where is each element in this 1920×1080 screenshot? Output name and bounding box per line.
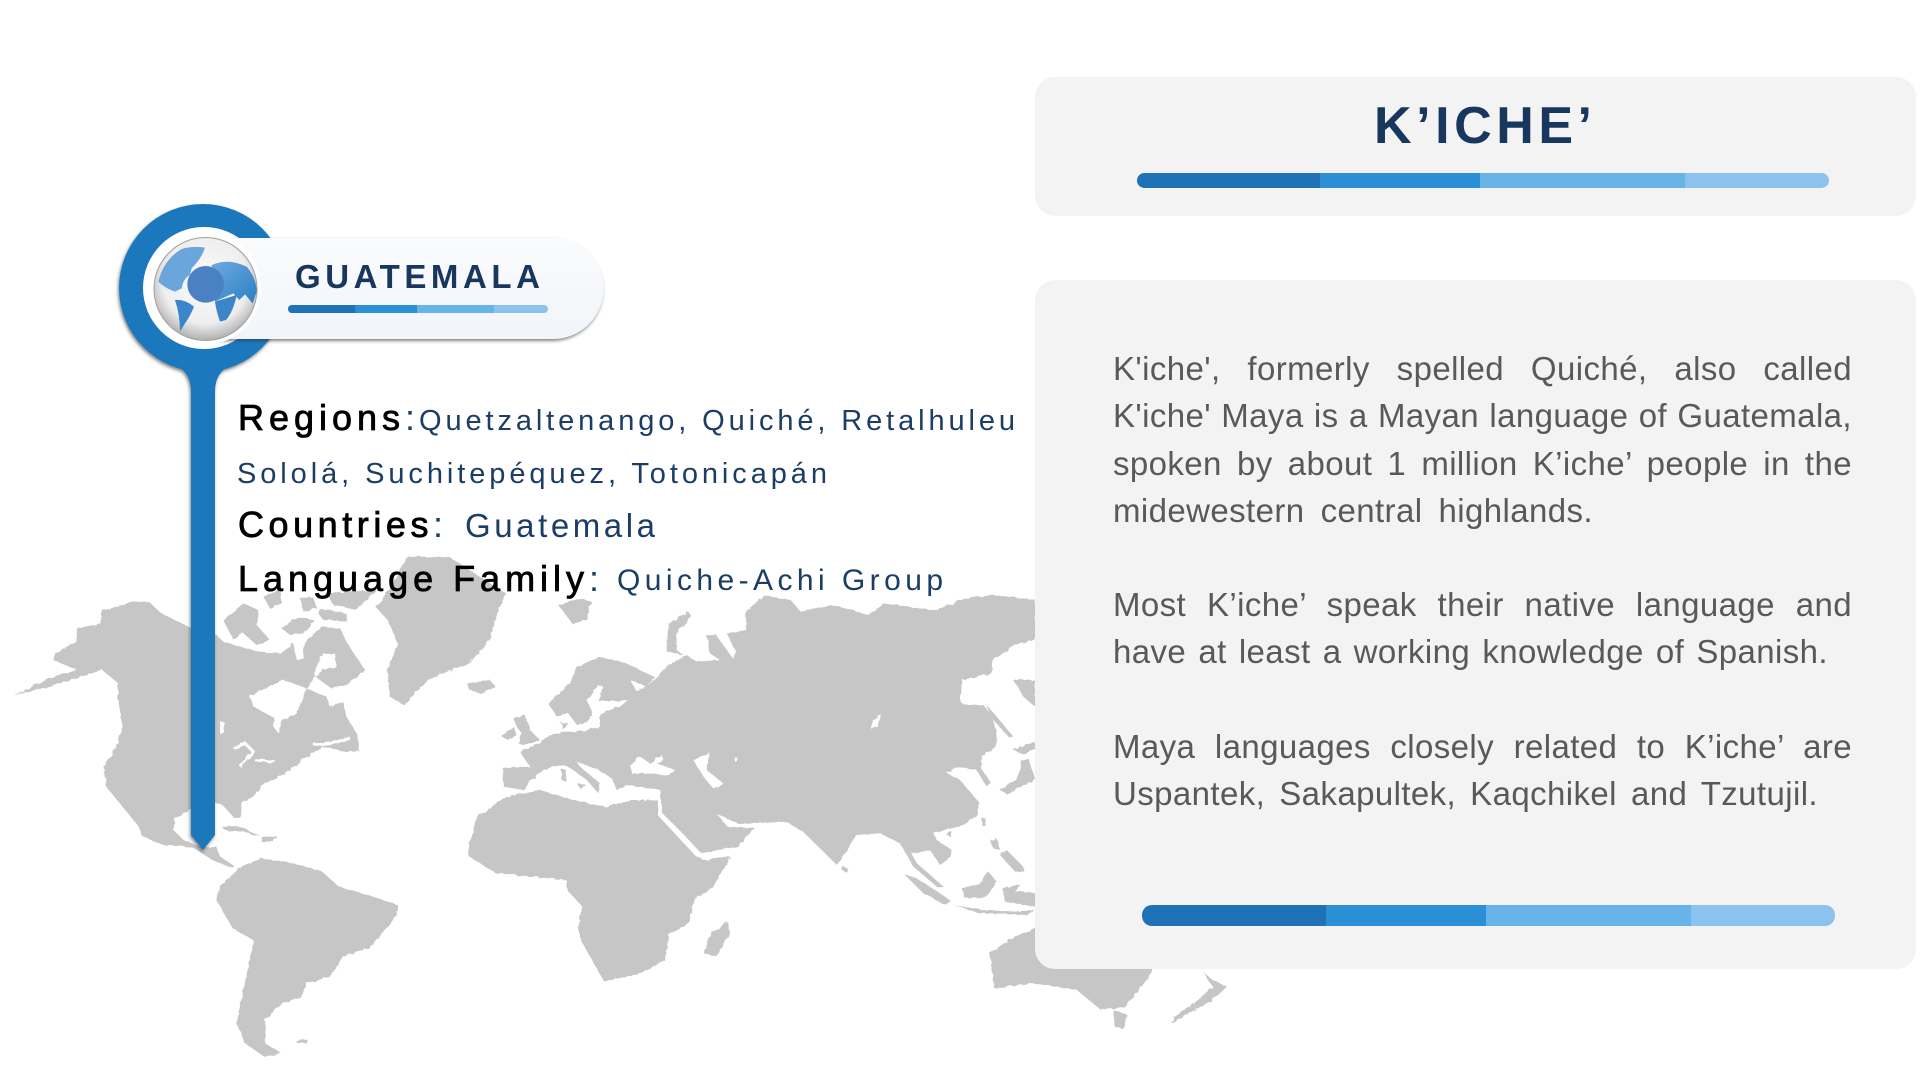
- regions label: Regions:: [238, 397, 415, 438]
- countries value: Guatemala: [465, 507, 656, 544]
- pin stem and ring: [119, 204, 287, 850]
- pin inner circle: [143, 227, 265, 349]
- panel: description: Maya languages closely related to K’iche’ are: [1113, 728, 1852, 765]
- regions and family details: [237, 397, 1015, 599]
- panel: description: K'iche' Maya is a Mayan language of Guatemala,: [1113, 397, 1852, 434]
- panel: description: Uspantek, Sakapultek, Kaqchikel and Tzutujil.: [1113, 775, 1818, 812]
- East Asia islands: [905, 680, 1035, 915]
- regions values line one: Quetzaltenango, Quiché, Retalhuleu: [419, 405, 1015, 437]
- country label pill: [147, 231, 604, 345]
- panel: description: midewestern central highlands.: [1113, 492, 1593, 529]
- language family label: Language Family:: [238, 558, 599, 599]
- title bar: [1137, 173, 1829, 188]
- countries label: Countries:: [238, 504, 443, 545]
- panel: description: Most K’iche’ speak their native language and: [1113, 586, 1852, 623]
- panel: description: spoken by about 1 million K’iche’ people in the: [1113, 445, 1852, 482]
- title: K’ICHE’: [1374, 97, 1592, 155]
- country name: GUATEMALA: [295, 258, 540, 295]
- paragraph: related languages: [1113, 728, 1852, 812]
- panel: description: [1035, 280, 1916, 969]
- panel: description: K'iche', formerly spelled Quiché, also called: [1113, 350, 1852, 387]
- paragraph: speakers: [1113, 586, 1852, 670]
- panel: description: have at least a working knowledge of Spanish.: [1113, 633, 1828, 670]
- bottom bar: [1142, 905, 1835, 926]
- icon: globe: [154, 238, 257, 340]
- regions values line two: Sololá, Suchitepéquez, Totonicapán: [237, 458, 827, 490]
- panel: title: [1035, 77, 1916, 216]
- arctic Canada: [220, 590, 377, 767]
- language family value: Quiche-Achi Group: [617, 564, 943, 597]
- country bar: [288, 305, 548, 313]
- paragraph: definition: [1113, 350, 1852, 529]
- world map: [14, 557, 1227, 1057]
- location pin: [119, 204, 604, 850]
- Europe and western Russia: [502, 598, 762, 793]
